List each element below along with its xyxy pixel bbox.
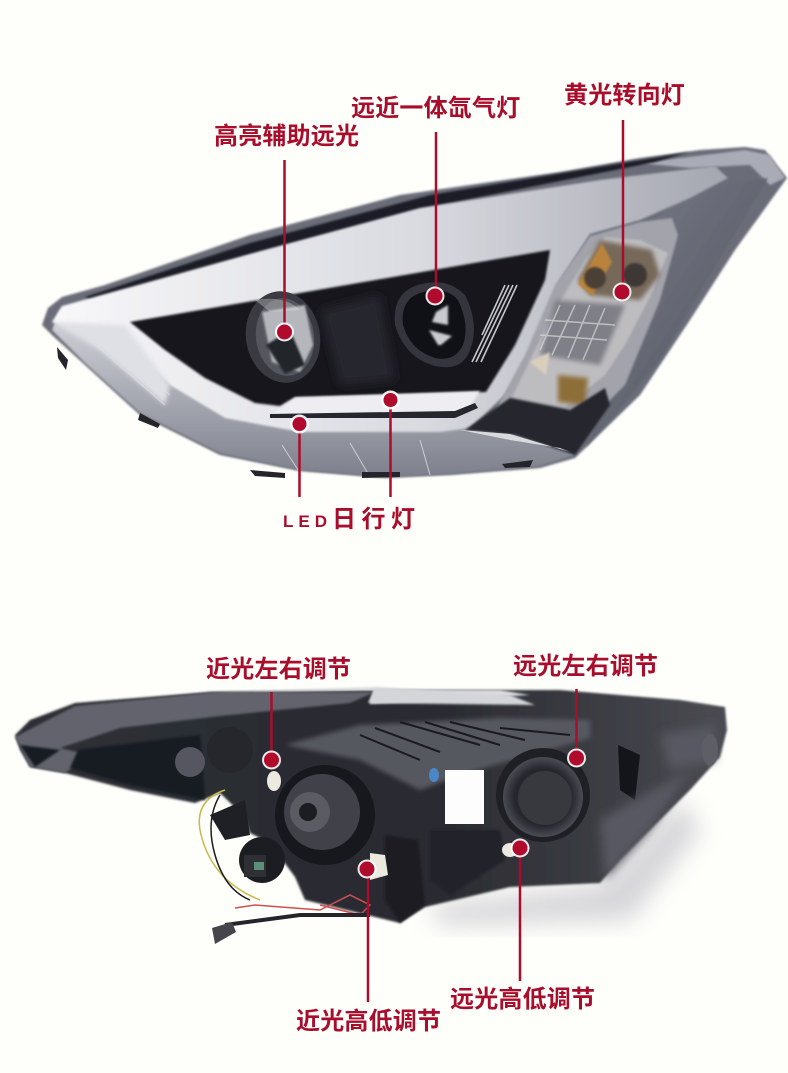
- pointer: 远光高低调节: [510, 838, 530, 981]
- DRL strip dark line: [270, 403, 478, 418]
- right reflections: [600, 725, 715, 880]
- photo: front of headlight: [42, 147, 787, 478]
- label: 远光左右调节: 远光左右调节: [513, 653, 658, 680]
- photo: rear of headlight: [15, 687, 727, 944]
- lens ribs: [90, 330, 430, 477]
- lens lower chrome strip: [460, 430, 570, 452]
- ribbed top cover: [285, 718, 590, 790]
- turn signal housing: [490, 218, 678, 420]
- protective film: [212, 687, 530, 704]
- ribs: [360, 722, 570, 760]
- label: 近光高低调节: 近光高低调节: [296, 1008, 441, 1035]
- outer right lens: [585, 178, 768, 448]
- lower plug and bracket: [385, 835, 425, 923]
- bottom socket connector: [239, 837, 285, 883]
- panel side ribs: [430, 830, 505, 895]
- lower dark shade: [465, 388, 610, 455]
- label: 远光高低调节: 远光高低调节: [450, 986, 595, 1013]
- label: 远近一体氙气灯: 远近一体氙气灯: [351, 95, 520, 122]
- dark bridge: [320, 295, 395, 385]
- pointer: LED right: [381, 390, 400, 497]
- rear housing: [15, 690, 727, 923]
- lens rim top: [15, 692, 375, 773]
- high beam back cap: [496, 748, 590, 842]
- blue sticker: [429, 768, 439, 782]
- pointer: 高亮辅助远光: [275, 160, 294, 342]
- inner dark mouth: [20, 735, 205, 800]
- pointer: 远近一体氙气灯: [426, 132, 444, 306]
- clear left corner: [52, 322, 170, 405]
- top right pale rim: [640, 150, 785, 185]
- DRL white strip: [270, 391, 480, 415]
- lens outer rim: [42, 147, 787, 478]
- black inner window: [130, 250, 550, 406]
- label: 高亮辅助远光: 高亮辅助远光: [214, 122, 359, 150]
- daytime running light band: [52, 166, 728, 432]
- clear lower lens: [52, 310, 575, 477]
- low beam projector: [239, 285, 327, 389]
- pointer: LED left: [290, 414, 309, 497]
- lower housing connector: [210, 800, 250, 840]
- pointer: 远光左右调节: [567, 689, 586, 768]
- lamp clips: [57, 347, 533, 478]
- label: LED日行灯: LED日行灯: [283, 506, 420, 533]
- wire plug: [212, 922, 236, 944]
- high beam projector: [395, 282, 474, 367]
- left round socket: [207, 727, 253, 773]
- side connector: [618, 745, 640, 800]
- low beam back cap: [275, 765, 375, 865]
- ground shadow: [430, 800, 700, 925]
- pointer: 黄光转向灯: [612, 120, 632, 302]
- chrome stripes: [472, 285, 517, 362]
- white label: [445, 770, 484, 824]
- pointer: 近光左右调节: [262, 692, 281, 770]
- pointer: 近光高低调节: [358, 860, 376, 1002]
- white adjusters: [267, 771, 518, 880]
- label: 近光左右调节: 近光左右调节: [206, 656, 351, 683]
- dark upper trim: [85, 152, 690, 302]
- labels and pointers: bottom: [206, 653, 658, 1035]
- labels and pointers: top: [214, 82, 685, 533]
- wires: [199, 790, 370, 925]
- label: 黄光转向灯: 黄光转向灯: [564, 82, 685, 109]
